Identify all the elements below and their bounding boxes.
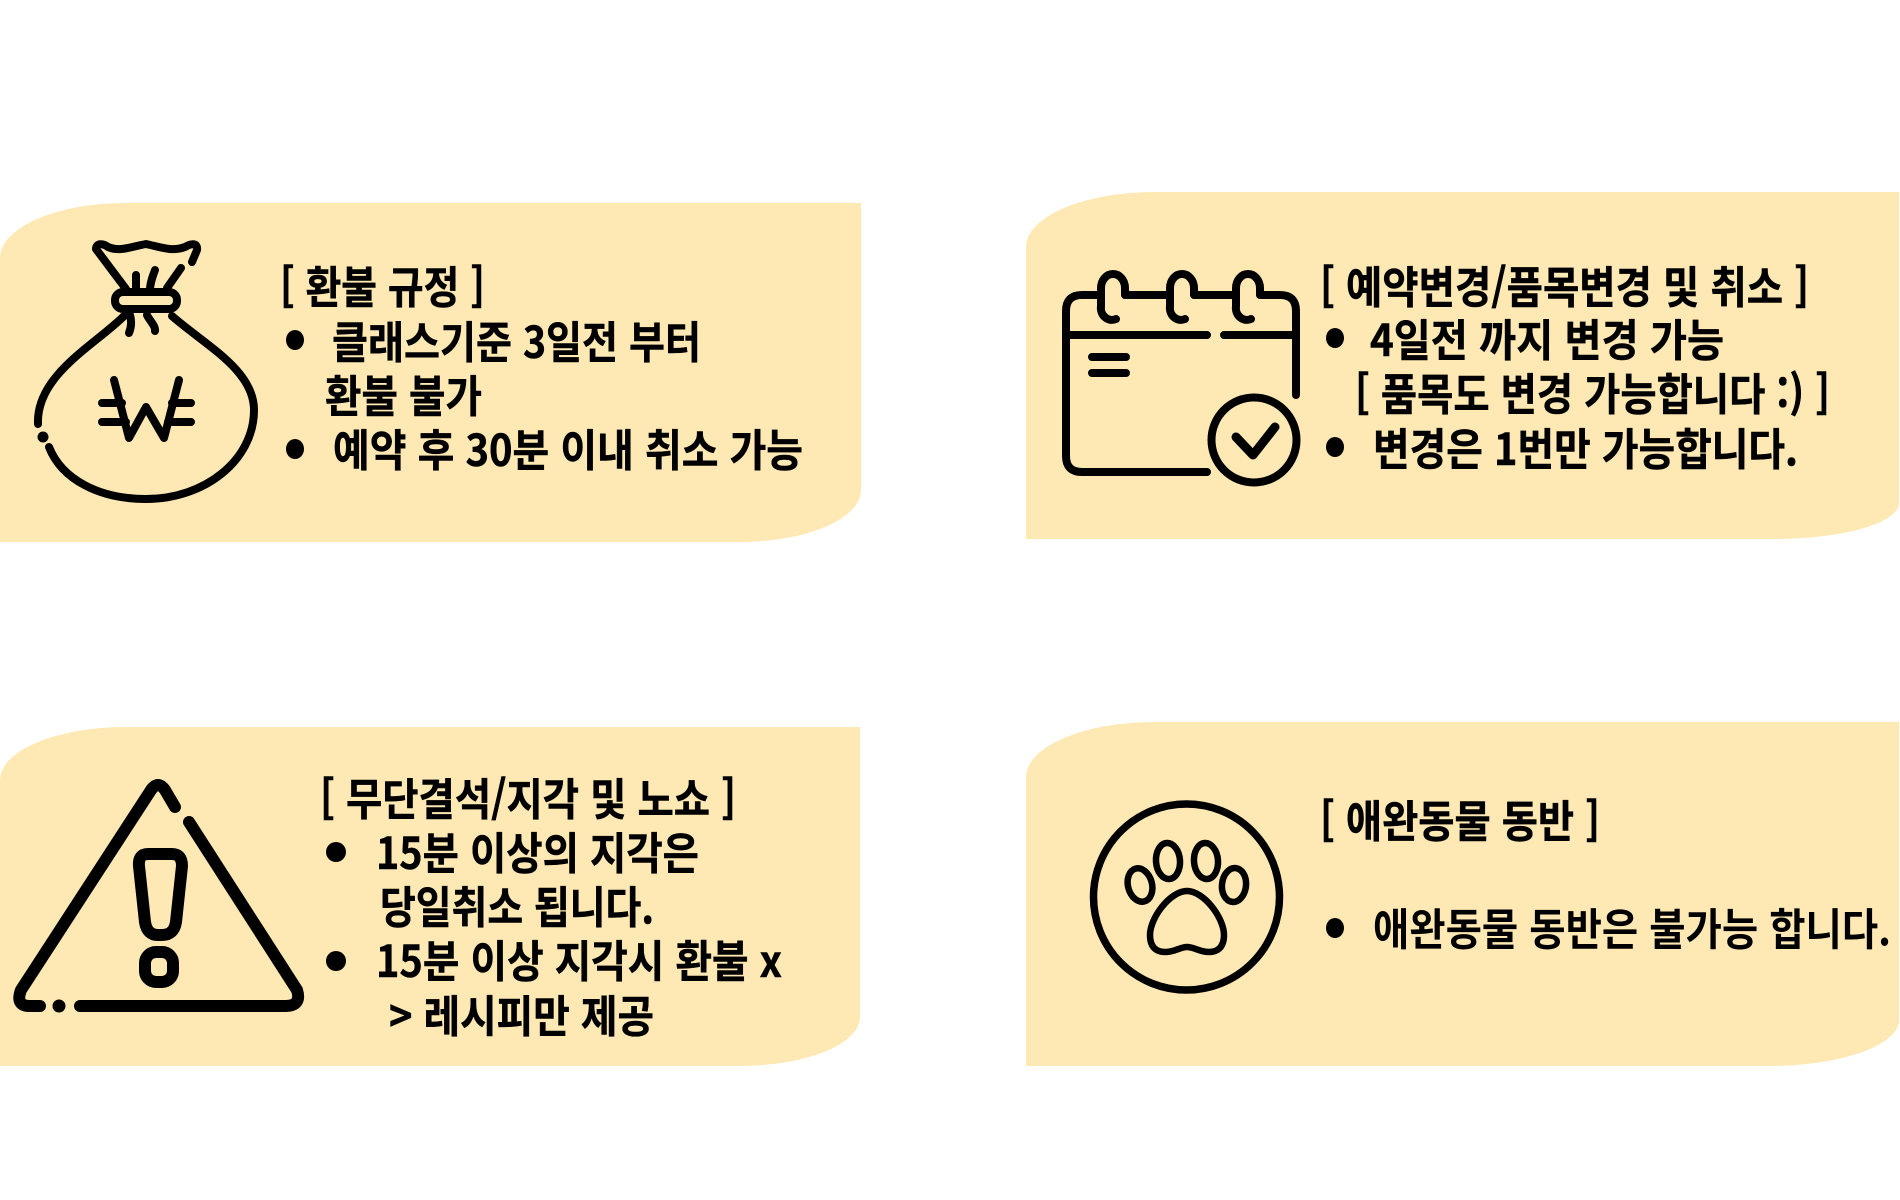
text block: change rules: 4일전 까지 변경 가능: [1370, 305, 1724, 369]
text block: change rules: [1326, 305, 1830, 478]
text block: lateness rules: [326, 818, 782, 1045]
icon: calendar with check: [1066, 274, 1296, 482]
text block: refund rules: 환불 불가: [325, 361, 482, 425]
text block: lateness rules: 15분 이상의 지각은: [376, 818, 699, 882]
heading: refund policy: [ 환불 규정 ]: [280, 252, 485, 316]
text block: refund rules: 클래스기준 3일전 부터: [332, 307, 701, 371]
heading: pets: [ 애완동물 동반 ]: [1320, 786, 1600, 850]
panel: reservation change: [1026, 192, 1899, 539]
text block: refund rules: 예약 후 30분 이내 취소 가능: [333, 415, 803, 479]
heading: no-show and lateness: [ 무단결석/지각 및 노쇼 ]: [320, 764, 736, 828]
text block: lateness rules: 당일취소 됩니다.: [380, 872, 654, 936]
panel: no-show and lateness: [0, 727, 860, 1066]
heading: reservation change: [ 예약변경/품목변경 및 취소 ]: [1320, 252, 1809, 316]
text block: change rules: 변경은 1번만 가능합니다.: [1373, 414, 1798, 478]
text block: refund rules: [286, 307, 803, 479]
panel: pets: [1026, 722, 1899, 1066]
icon: paw print: [1094, 804, 1280, 990]
text block: change rules: [ 품목도 변경 가능합니다 :) ]: [1355, 359, 1830, 423]
text block: lateness rules: > 레시피만 제공: [389, 981, 654, 1045]
icon: money bag with won sign: [38, 244, 254, 499]
panel: refund policy: [0, 203, 861, 542]
text block: lateness rules: 15분 이상 지각시 환불 x: [376, 926, 782, 990]
icon: warning triangle: [19, 785, 298, 1010]
